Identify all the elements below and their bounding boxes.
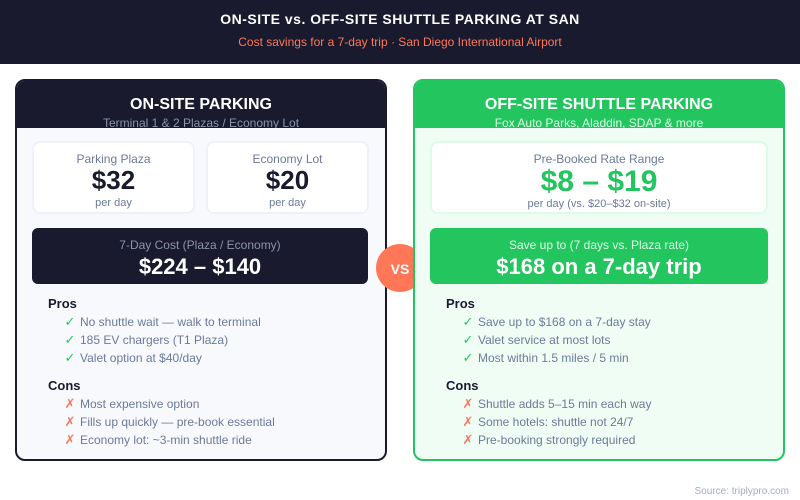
off-site cons list: Pre-booking strongly required: [478, 433, 635, 447]
savings bar: [430, 228, 768, 284]
on-site pros heading: Pros: [48, 296, 77, 311]
off-site pros heading: Pros: [446, 296, 475, 311]
economy lot price card: per day: [269, 197, 306, 209]
on-site cons heading: Cons: [48, 378, 80, 393]
on-site panel header: [15, 79, 387, 128]
panel: off-site shuttle parking: [413, 79, 785, 461]
VS badge: [376, 244, 424, 292]
off-site cons list: [463, 397, 652, 448]
on-site cons list: ✗: [65, 397, 75, 412]
on-site pros list: Valet option at $40/day: [80, 351, 202, 365]
savings bar: Save up to (7 days vs. Plaza rate): [509, 238, 689, 252]
7-day cost bar: [32, 228, 368, 284]
on-site pros list: ✓: [65, 351, 75, 366]
savings bar: $168 on a 7-day trip: [496, 254, 702, 279]
VS badge: VS: [391, 261, 409, 277]
economy lot price card: $20: [266, 165, 309, 195]
pre-booked rate card: Pre-Booked Rate Range: [534, 152, 664, 166]
parking plaza price card: Parking Plaza: [76, 152, 151, 166]
source note: Source: triplypro.com: [695, 486, 789, 497]
pre-booked rate card: per day (vs. $20–$32 on-site): [527, 198, 671, 210]
off-site cons heading: Cons: [446, 378, 478, 393]
economy lot price card: Economy Lot: [252, 152, 323, 166]
off-site cons list: Shuttle adds 5–15 min each way: [478, 397, 651, 411]
parking plaza price card: $32: [92, 165, 135, 195]
pre-booked rate card: $8 – $19: [541, 165, 657, 198]
off-site pros list: ✓: [463, 333, 473, 348]
off-site pros list: ✓: [463, 315, 473, 330]
off-site cons list: ✗: [463, 415, 473, 430]
on-site pros list: No shuttle wait — walk to terminal: [80, 315, 261, 329]
off-site heading: OFF-SITE SHUTTLE PARKING: [485, 96, 713, 113]
subtitle: Cost savings for a 7-day trip · San Diego International Airport: [238, 35, 562, 49]
on-site cons list: Most expensive option: [80, 397, 199, 411]
on-site cons list: ✗: [65, 433, 75, 448]
on-site cons list: ✗: [65, 415, 75, 430]
on-site pros list: ✓: [65, 333, 75, 348]
off-site pros list: Save up to $168 on a 7-day stay: [478, 315, 651, 329]
pre-booked rate card: [430, 141, 768, 214]
7-day cost bar: $224 – $140: [139, 254, 261, 279]
off-site pros list: Most within 1.5 miles / 5 min: [478, 351, 629, 365]
off-site pros list: ✓: [463, 351, 473, 366]
parking plaza price card: per day: [95, 197, 132, 209]
on-site cons list: Economy lot: ~3-min shuttle ride: [80, 433, 252, 447]
economy lot price card: [206, 141, 369, 214]
on-site pros list: ✓: [65, 315, 75, 330]
panel: on-site parking: [15, 79, 387, 461]
off-site panel header: [413, 79, 785, 128]
off-site cons list: ✗: [463, 433, 473, 448]
7-day cost bar: 7-Day Cost (Plaza / Economy): [119, 238, 281, 252]
on-site cons list: [65, 397, 275, 448]
off-site cons list: ✗: [463, 397, 473, 412]
off-site pros list: [463, 315, 651, 366]
on-site pros list: [65, 315, 261, 366]
off-site pros list: Valet service at most lots: [478, 333, 610, 347]
header banner: [0, 0, 800, 64]
on-site heading: ON-SITE PARKING: [130, 96, 272, 113]
off-site cons list: Some hotels: shuttle not 24/7: [478, 415, 633, 429]
on-site cons list: Fills up quickly — pre-book essential: [80, 415, 275, 429]
title: ON-SITE vs. OFF-SITE SHUTTLE PARKING AT SAN: [220, 11, 580, 27]
on-site pros list: 185 EV chargers (T1 Plaza): [80, 333, 228, 347]
parking plaza price card: [32, 141, 195, 214]
